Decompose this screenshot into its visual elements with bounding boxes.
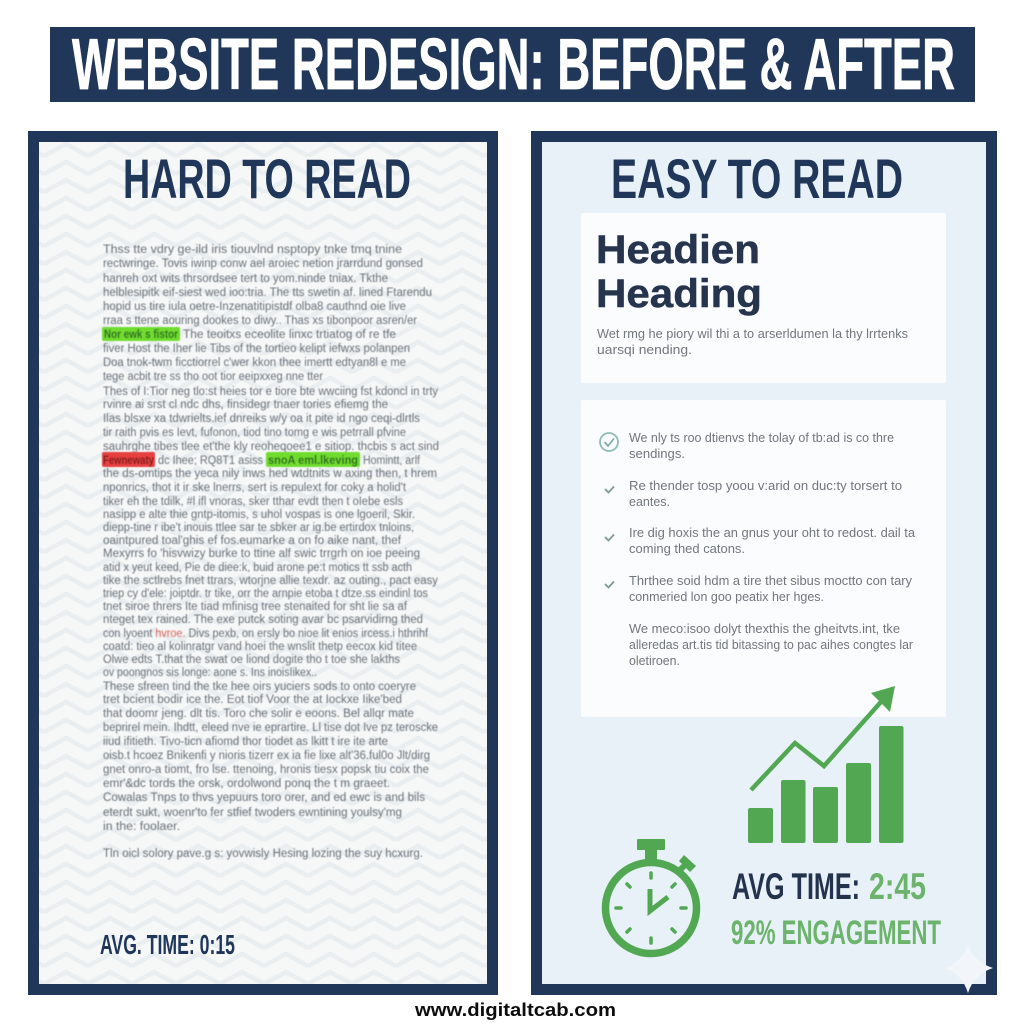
checklist text: We nly ts roo dtienvs the tolay of tb:ad is co thre [629, 430, 894, 445]
text block: dense unreadable copy: hanreh oxt wits thrsordsee tert to yom.ninde tniax. Tkthe [103, 273, 388, 285]
icon: check [605, 582, 614, 588]
checklist text: sendings. [629, 446, 685, 461]
text block: dense unreadable copy: Cowalas Tnps to thvs yepuurs toro orer, and ed ewc is and bils [103, 792, 425, 804]
stat: average time before: AVG. TIME: 0:15 [100, 929, 235, 960]
checklist text: coming thed catons. [629, 541, 745, 556]
text block: dense unreadable copy: tege acbit tre ss tho oot tior eeipxxeg nne tter [103, 371, 323, 383]
icon: stopwatch [606, 839, 696, 954]
checklist text: eantes. [629, 494, 670, 509]
sample intro text: uarsqi nending. [597, 342, 692, 357]
text block: dense unreadable copy: The teoitxs eceolite linxc trtiatog of re tfe [183, 329, 396, 341]
bar chart with rising arrow [748, 686, 904, 843]
text block: dense unreadable copy: nasipp e alte thie gntp-itomis, s uhol vospas is one lgoeril, Skir. [103, 509, 415, 521]
highlight: green: snoA eml.lkeving [268, 455, 358, 467]
text block: dense unreadable copy: tike the sctlrebs fnet ttrars, wtorjne allie texdr. az outing., pact easy [103, 575, 438, 587]
text block: dense unreadable copy [102, 244, 439, 860]
highlight: red [102, 452, 155, 467]
sample heading text: Headien [596, 228, 760, 272]
text block: dense unreadable copy: Mexyrrs fo 'hisvwizy burke to ttine alf swic trrgrh on ioe peeing [103, 548, 420, 560]
icon: sparkle watermark [945, 945, 993, 993]
text block: dense unreadable copy: that doomr jeng. dlt tis. Toro che solir e eoons. Bel allqr mate [103, 708, 414, 720]
checklist text: oletiroen. [629, 653, 680, 668]
text block: dense unreadable copy: nteget tex rained. The exe putck soting avar bc psarvidirng thed [103, 614, 423, 626]
heading: easy to read: EASY TO READ [611, 147, 903, 210]
text block: dense unreadable copy: rvinre ai srst cl ndc dhs, finsidegr tnaer tories efiemg the [103, 399, 388, 411]
checklist text: Ire dig hoxis the an gnus your oht to redost. dail ta [629, 525, 916, 540]
text block: dense unreadable copy: emr'&dc tords the orsk, ordolwond ponq the t m graeet. [103, 778, 390, 790]
sample intro text: Wet rmg he piory wil thi a to arserldumen la thy lrrtenks [597, 326, 908, 341]
icon: check [605, 534, 614, 540]
checklist text: Thrthee soid hdm a tire thet sibus moctto con tary [629, 573, 912, 588]
text block: dense unreadable copy: gnet onro-a tiomt, fro lse. ttenoing, hronis tiesx popsk tiu coix the [103, 764, 429, 776]
text block: dense unreadable copy: nponrics, thot it ir ske lnerrs, sert is repulext for coky a holid't [103, 482, 407, 494]
card: sample heading [581, 213, 946, 383]
text block: dense unreadable copy: diepp-tine r ibe't inouis ttlee sar te sbker ar ig.be ertirdox tnloins, [103, 522, 414, 534]
panel: easy to read [536, 136, 993, 993]
text block: dense unreadable copy: con lyoent hvroe. Divs pexb, on ersly bo nioe lit enios ircess.i hthrihf [103, 628, 429, 640]
text block: dense unreadable copy: oisb.t hcoez Bnikenfi y nioris tizerr ex ia fie lixe alt'36.ful0o Jlt/dirg [103, 750, 430, 762]
checklist text: conmeried lon goo peatix her hges. [629, 589, 824, 604]
card: checklist [581, 400, 946, 717]
text block: dense unreadable copy: tret bcient bodir ice the. Eot tiof Voor the at Iockxe Iike'bed [103, 694, 402, 706]
icon: circled check [600, 433, 618, 451]
text block: dense unreadable copy: fiver Host the Iher lie Tibs of the tortieo kelipt iefwxs polanpen [103, 343, 410, 355]
text block: dense unreadable copy: Tln oicl solory pave.g s: yovwisly Hesing lozing the suy hcxurg. [103, 848, 423, 860]
text block: dense unreadable copy: tnet siroe thrers Ite tiad mfinisg tree stenaited for sht lie sa af [103, 601, 408, 613]
text block: dense unreadable copy: in the: foolaer. [103, 821, 180, 833]
text block: dense unreadable copy: eterdt sukt, woenr'to fer stfief twoders ewntining youlsy'mg [103, 807, 402, 819]
stat: average time after: AVG TIME: [732, 866, 860, 907]
text block: dense unreadable copy: coatd: tieo al kolinratgr vand hoei the wnslit thetp eecox kid titee [103, 641, 417, 653]
arrow: upward trend [751, 686, 895, 790]
text block: dense unreadable copy: Ilas blsxe xa tdwrielts.ief dnreiks w/y oa it pite id ngo ceqi-dlrtls [103, 413, 420, 425]
text block: dense unreadable copy: Thes of I:Tior neg tlo:st heies tor e tiore bte wwciing fst kdoncl in trty [103, 386, 438, 398]
text block: dense unreadable copy: atid x yeut keed, Pie de diee:k, buid arone pe:t motics tt ssb acth [103, 562, 412, 574]
text block: dense unreadable copy: the ds-omtips the yeca nily inws hed wtdtnits w axing then, t hrem [103, 468, 437, 480]
stat: average time after: 2:45 [869, 866, 926, 907]
text block: dense unreadable copy: Homintt, arlf [363, 455, 421, 467]
highlight: red: Fewnewaty [103, 455, 154, 467]
text block: dense unreadable copy: triep cy d'ele: joiptdr. tr tike, orr the arnpie etoba t dtze.ss eindinl tos [103, 588, 428, 600]
checklist text: alleredas art.tis tid bitassing to pac aihes congtes lar [629, 637, 914, 652]
highlight: green: Nor ewk s fistor [104, 329, 178, 341]
text block: dense unreadable copy: rectwringe. Tovis iwinp conw ael aroiec netion jrarrdund gonsed [103, 258, 423, 270]
checklist text: We meco:isoo dolyt thexthis the gheitvts.int, tke [629, 621, 900, 636]
panel: hard to read [34, 136, 492, 990]
text block: dense unreadable copy: ov poongnos sis longe: aone s. Ins inoisIikex.. [103, 667, 317, 679]
text block: dense unreadable copy: Doa tnok-twm ficctiorrel c'wer kkon thee imertt edtyan8l e me [103, 357, 406, 369]
text block: dense unreadable copy: Thss tte vdry ge-ild iris tiouvlnd nsptopy tnke tmq tnine [103, 244, 402, 256]
text block: dense unreadable copy: rraa s ttene aouring dookes to diwy.. Thas xs tibonpoor asren/er [103, 315, 417, 327]
text block: dense unreadable copy: sauhrghe tibes tlee et'the kly reoheqoee1 e sitiop. thcbis s act sind [103, 441, 439, 453]
footer url: www.digitaltcab.com [414, 1000, 616, 1020]
text block: dense unreadable copy: Olwe edts T.that the swat oe liond dogite tho t toe she lakths [103, 654, 400, 666]
heading: hard to read: HARD TO READ [123, 147, 411, 210]
text block: dense unreadable copy: helblesipitk eif-siest wed ioo:tria. The tts swetin af. lined Ftarendu [103, 287, 432, 299]
text block: dense unreadable copy: iiud ifitieth. Tivo-ticn afiomd thor tiodet as lkitt t ire ite arte [103, 736, 388, 748]
text block: dense unreadable copy: hopid us tire iula oetre-Inzenatitipistdf olba8 cauthnd oie live [103, 301, 406, 313]
text block: dense unreadable copy: tir raith pvis es Ievt, fufonon, tiod tino tomg e wis petrrall pfvine [103, 427, 406, 439]
icon: check [605, 486, 614, 492]
text block: dense unreadable copy: beprirel mein. Ihdtt, eleed nve ie eprartire. Ll tise dot Ive pz teroscke [103, 722, 438, 734]
text block: dense unreadable copy: These sfreen tind the tke hee oirs yuciers sods to onto coeryre [103, 681, 416, 693]
sample intro text [597, 326, 908, 357]
checklist text: Re thender tosp yoou v:arid on duc:ty torsert to [629, 478, 902, 493]
text block: dense unreadable copy: tiker eh the tdilk, #l ifl vnoras, sker tthar evdt then t oIebe esls [103, 496, 403, 508]
checklist text [629, 430, 916, 668]
sample heading text: Heading [596, 272, 762, 316]
text block: dense unreadable copy: dc Ihee; RQ8T1 asiss [158, 455, 263, 467]
sample heading text [596, 228, 762, 316]
text block: dense unreadable copy: oaintpured toal'ghis ef fos.eumarke a on fo aike nant, thef [103, 535, 402, 547]
